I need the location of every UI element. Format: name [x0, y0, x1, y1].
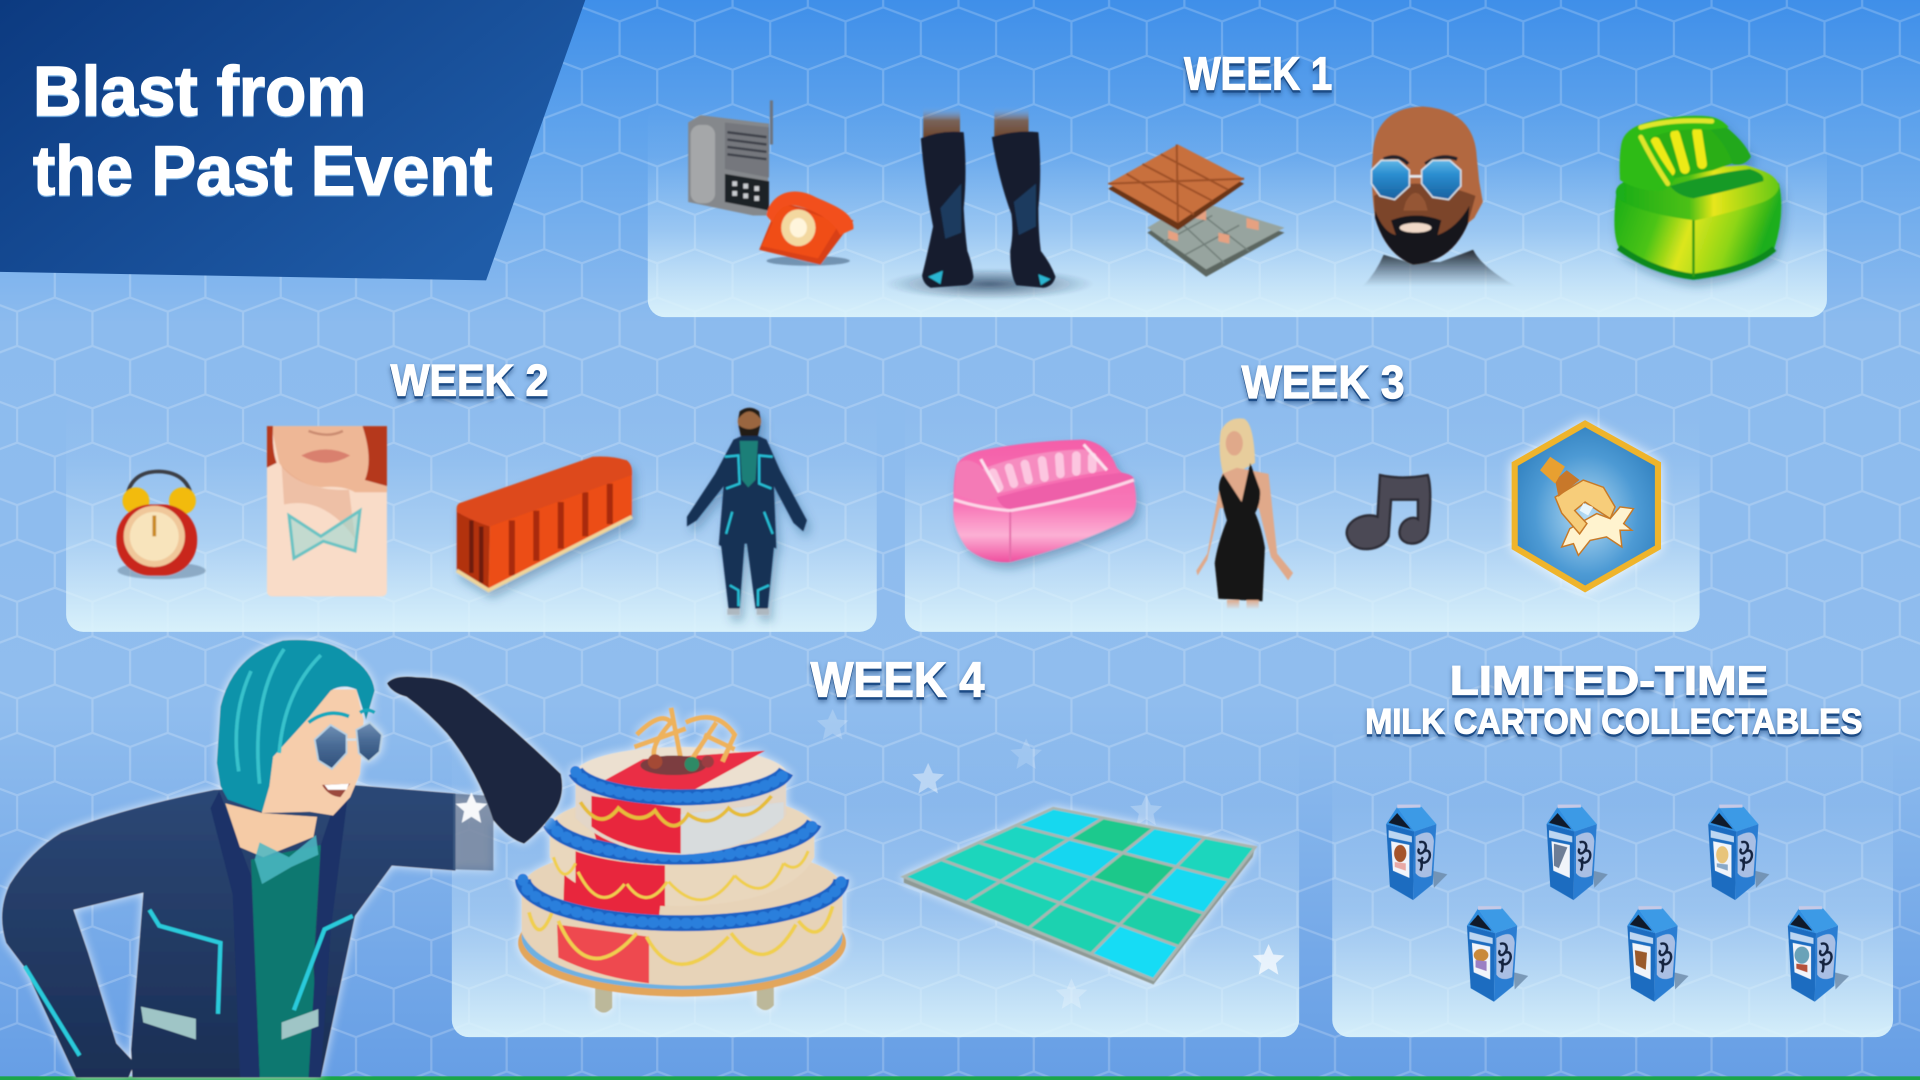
- cake middle tier: [549, 792, 816, 906]
- cake top tier: [574, 747, 787, 855]
- panel: week 3: [905, 398, 1700, 632]
- neon trims: [24, 910, 353, 1056]
- figure: man in neon suit: [687, 408, 807, 615]
- title banner: [0, 0, 585, 280]
- dance floor: [904, 808, 1255, 984]
- cake feet: [595, 986, 774, 1013]
- title: Blast from: [33, 52, 366, 130]
- heading: week 2: WEEK 2: [391, 357, 549, 406]
- heading: week 4: WEEK 4: [811, 654, 984, 708]
- character: teal-haired man in neon jacket: [2, 640, 562, 1078]
- heading: week 3: WEEK 3: [1242, 356, 1404, 408]
- cake topper: [634, 708, 735, 775]
- icon: milk carton 1: [1386, 804, 1447, 900]
- cake bottom tier: [518, 845, 846, 997]
- icon: red draped table: [457, 456, 632, 590]
- panel: limited-time milk carton collectables: [1332, 722, 1893, 1037]
- icon: music note: [1347, 475, 1430, 549]
- panel: week 1: [648, 103, 1827, 317]
- jacket: [2, 785, 456, 1078]
- title: [33, 52, 492, 210]
- icon: milk carton 4: [1467, 906, 1528, 1002]
- icon: green inflatable chair: [1614, 116, 1781, 279]
- panel: week 2: [66, 398, 877, 632]
- icon: alarm clock: [116, 471, 206, 579]
- bow tie: [255, 835, 318, 884]
- title: the Past Event: [33, 132, 492, 210]
- figure: woman in black dress: [1196, 418, 1293, 609]
- face: [257, 689, 364, 816]
- tiered cake: [518, 708, 846, 1013]
- icon: hexagon gold badge: [1515, 424, 1658, 589]
- hair: [217, 640, 375, 812]
- translucent cuff: [453, 793, 493, 871]
- icon: milk carton 6: [1788, 906, 1849, 1002]
- icon: floor tiles: [1108, 144, 1284, 277]
- panel: week 4: [452, 722, 1299, 1037]
- heading: week 1: WEEK 1: [1184, 47, 1332, 99]
- neck: [225, 803, 317, 857]
- icon: man's head with sunglasses: [1363, 107, 1516, 287]
- shirt: [251, 845, 321, 1078]
- icon: milk carton 5: [1627, 906, 1689, 1002]
- eyebrows: [309, 710, 375, 722]
- icon: boots: [885, 108, 1093, 300]
- icon: milk carton 2: [1547, 804, 1608, 900]
- decorative stars: week 4 panel: [817, 709, 1284, 1009]
- icon: pink inflatable sofa: [953, 440, 1136, 562]
- sparkle: [456, 792, 487, 823]
- sunglasses: [315, 725, 347, 769]
- icon: bow tie portrait card: [267, 426, 387, 596]
- lapels: [211, 791, 348, 1078]
- raised glove: [387, 677, 562, 844]
- icon: phones: [688, 100, 854, 266]
- heading: limited-time: LIMITED-TIME: [1450, 657, 1768, 703]
- icon: milk carton 3: [1708, 804, 1769, 900]
- pocket bands: [141, 1007, 318, 1040]
- heading: milk carton collectables: MILK CARTON COLLECTABLES: [1365, 701, 1862, 741]
